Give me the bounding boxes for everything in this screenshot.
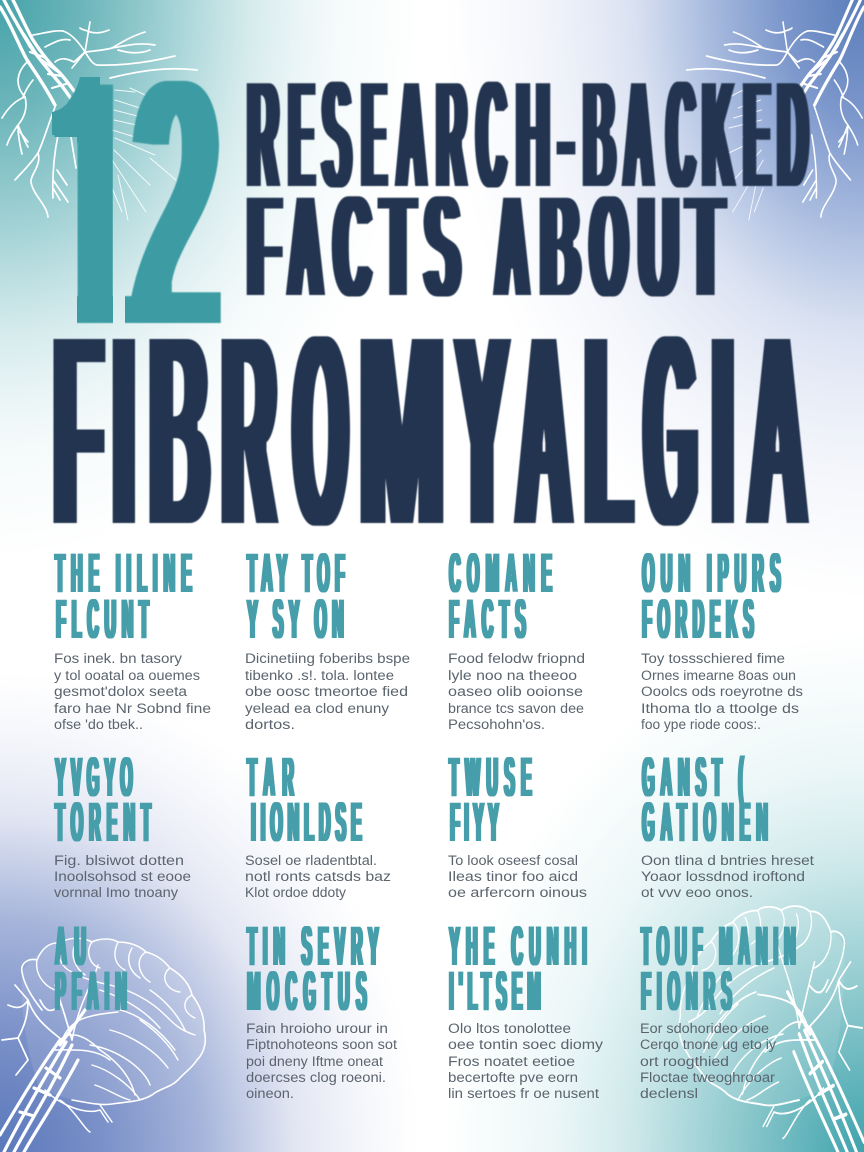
fact: column 3 row 2 (448, 746, 587, 900)
body text (448, 1021, 603, 1101)
heading (55, 746, 151, 853)
fact: column 1 row 3 (55, 915, 127, 1022)
heading (641, 915, 796, 1022)
body text: poi dneny Iftme oneat (246, 1054, 383, 1069)
title line: research-backed: C (477, 47, 506, 223)
title line: facts about: A (289, 162, 322, 330)
heading: THE IILINE (55, 542, 192, 604)
body text: To look oseesf cosal (448, 853, 578, 868)
title line: facts about: U (639, 162, 678, 330)
body text: Fiptnohoteons soon sot (246, 1037, 397, 1052)
title line: facts about: A (496, 162, 528, 330)
body text: notl ronts catsds baz (245, 869, 391, 884)
illustration: brain bottom right (679, 906, 864, 1152)
body text (641, 853, 814, 900)
title line: facts about: B (541, 162, 580, 330)
body text: Yoaor lossdnod iroftond (641, 869, 805, 884)
fact: column 2 row 3 (246, 915, 397, 1101)
body text: Oon tlina d bntries hreset (641, 853, 814, 868)
body text: gesmot'dolox seeta (54, 684, 188, 699)
fact: column 4 row 3 (640, 915, 796, 1101)
heading: GANST ( (642, 746, 744, 808)
title line: research-backed: S (323, 47, 351, 223)
title line: research-backed: R (248, 47, 278, 223)
body text: Inoolsohsod st eooe (54, 869, 191, 884)
body text: Sosel oe rladentbtal. (245, 853, 377, 868)
body text: Ornes imearne 8oas oun (641, 668, 796, 683)
title line: research-backed: K (703, 47, 734, 223)
heading: TOUF MANIN (641, 915, 796, 977)
body text: oaseo olib ooionse (448, 684, 583, 699)
body text: Fig. blsiwot dotten (54, 853, 184, 868)
fact: column 3 row 3 (448, 915, 603, 1101)
title line: facts about: C (335, 162, 370, 330)
body text (640, 1021, 776, 1101)
heading: TIN SEVRY (247, 915, 379, 977)
title line: research-backed: A (624, 47, 653, 223)
fact: column 4 row 2 (641, 746, 814, 900)
fact: column 2 row 1 (245, 542, 410, 732)
heading: YHE CUNHI (449, 915, 587, 977)
title line: fibromyalgia: I (713, 275, 733, 587)
body text: yelead ea clod enuny (245, 701, 389, 716)
heading: FLCUNT (56, 588, 149, 650)
fact: column 2 row 2 (245, 746, 391, 900)
body text: faro hae Nr Sobnd fine (54, 701, 211, 716)
title line: research-backed: C (667, 47, 695, 223)
body text: Fos inek. bn tasory (54, 651, 182, 666)
title line: fibromyalgia: R (223, 275, 276, 587)
heading: AU (55, 915, 86, 977)
title (52, 77, 810, 527)
illustration: nerves top right (687, 0, 864, 220)
body text: vornnal Imo tnoany (54, 885, 178, 900)
fact: column 3 row 1 (448, 542, 585, 732)
body text (246, 1021, 397, 1101)
body text (245, 853, 391, 900)
heading (247, 915, 379, 1022)
title line: facts about: O (591, 162, 627, 330)
heading: PFAIN (55, 960, 127, 1022)
body text: Ooolcs ods roeyrotne ds (641, 684, 803, 699)
body text (448, 651, 585, 732)
body text: Cerqo tnone ug eto iy (640, 1037, 776, 1052)
body text (54, 651, 211, 732)
fact: column 1 row 2 (54, 746, 191, 900)
heading (642, 542, 781, 650)
title line: research-backed: B (584, 47, 615, 223)
body text: Olo ltos tonolottee (448, 1021, 571, 1036)
heading: Y SY ON (247, 588, 344, 650)
title line: facts about: S (425, 162, 459, 330)
heading: IIONLDSE (251, 791, 362, 853)
body text: ofse 'do tbek.. (54, 717, 143, 732)
body text: oe arfercorn oinous (448, 885, 587, 900)
heading (55, 915, 127, 1022)
title line: research-backed: E (744, 47, 770, 223)
heading: TAR (247, 746, 294, 808)
number 12: 1 (53, 1, 131, 405)
body text: tibenko .s!. tola. lontee (245, 668, 394, 683)
heading (247, 542, 345, 650)
heading: MOCGTUS (247, 960, 367, 1022)
body text: declensl (640, 1086, 698, 1101)
body text: Dicinetiing foberibs bspe (245, 651, 410, 666)
title line: fibromyalgia: I (114, 275, 134, 587)
title line: research-backed: E (362, 47, 386, 223)
heading: FACTS (449, 588, 526, 650)
title line: research-backed: A (397, 47, 426, 223)
title: 2 (134, 1, 219, 405)
heading (449, 542, 552, 650)
body text: dortos. (245, 717, 295, 732)
body text: doercses clog roeoni. (246, 1070, 386, 1085)
title line: fibromyalgia: O (294, 275, 347, 587)
heading: FIONRS (641, 960, 732, 1022)
heading: YVGYO (55, 746, 133, 808)
body text: Ithoma tlo a ttoolge ds (641, 701, 799, 716)
body text: y tol ooatal oa ouemes (54, 668, 200, 683)
heading: TWUSE (449, 746, 532, 808)
body text: lin sertoes fr oe nusent (448, 1086, 599, 1101)
fact: column 4 row 1 (641, 542, 803, 732)
title line: facts about: F (248, 162, 280, 330)
body text (641, 651, 803, 732)
heading: COMANE (449, 542, 552, 604)
title: T (688, 162, 723, 330)
body text: foo ype riode coos:. (641, 717, 761, 732)
number 12 (52, 77, 222, 324)
heading: FORDEKS (642, 588, 754, 650)
title line: facts about: T (382, 162, 414, 330)
body text (448, 853, 587, 900)
heading (449, 746, 532, 853)
body text: Pecsohohn'os. (448, 717, 545, 732)
fact: column 1 row 1 (54, 542, 211, 732)
body text (245, 651, 410, 732)
body text (54, 853, 191, 900)
body text: becertofte pve eorn (448, 1070, 578, 1085)
title line: research-backed: H (517, 47, 549, 223)
body text: oee tontin soec diomy (448, 1037, 603, 1052)
title line: research-backed: R (437, 47, 466, 223)
title line: research-backed: - (559, 47, 573, 223)
heading (449, 915, 587, 1022)
heading (642, 746, 768, 853)
body text: Eor sdohorideo oioe (640, 1021, 769, 1036)
title line: fibromyalgia: B (150, 275, 209, 587)
body text: ort roogthied (640, 1054, 729, 1069)
body text: Fros noatet eetioe (448, 1054, 575, 1069)
title line: fibromyalgia: A (517, 275, 571, 587)
heading: TAY TOF (247, 542, 345, 604)
title line: fibromyalgia: G (645, 275, 696, 587)
body text: lyle noo na theeoo (448, 668, 577, 683)
body text: brance tcs savon dee (448, 701, 584, 716)
heading: OUN IPURS (642, 542, 781, 604)
body text: Toy tossschiered fime (641, 651, 785, 666)
title line: fibromyalgia: L (586, 275, 631, 587)
body text: Food felodw friopnd (448, 651, 585, 666)
heading (247, 746, 362, 853)
body text: Klot ordoe ddoty (245, 885, 346, 900)
heading: GATIONEN (642, 791, 768, 853)
body text: obe oosc tmeortoe fied (245, 684, 408, 699)
illustration: brain bottom left (0, 938, 205, 1152)
title line: fibromyalgia: F (54, 275, 102, 587)
illustration: nerves top left (0, 0, 197, 220)
body text: Ileas tinor foo aicd (448, 869, 578, 884)
body text: ot vvv eoo onos. (641, 885, 753, 900)
heading: FIYY (450, 791, 499, 853)
body text: Fain hroioho urour in (246, 1021, 388, 1036)
body text: Floctae tweoghrooar (640, 1070, 776, 1085)
heading: TORENT (55, 791, 151, 853)
heading (55, 542, 192, 650)
title line: research-backed: E (289, 47, 314, 223)
title line: fibromyalgia: M (360, 275, 444, 587)
body text: oineon. (246, 1086, 294, 1101)
heading: I'LTSEM (449, 960, 541, 1022)
title line: fibromyalgia: Y (456, 275, 508, 587)
